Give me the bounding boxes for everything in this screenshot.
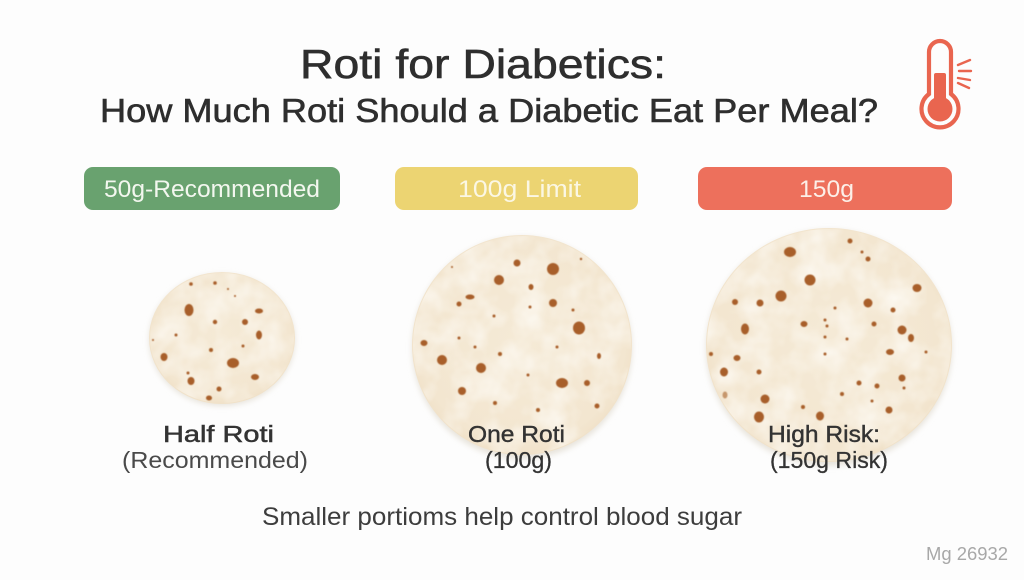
badge: 150g: 150g [799,176,854,203]
label: high risk: (150g Risk) [770,447,888,473]
badge: 50g recommended [84,167,340,210]
badge: 100g limit [395,167,638,210]
label: one roti: (100g) [485,447,552,473]
label: half roti [122,421,308,473]
roti: one [412,235,632,459]
icon: thermometer [922,41,971,127]
roti: half [149,272,295,406]
badge: 100g limit: 100g Limit [458,176,581,203]
label: half roti: (Recommended) [122,447,308,473]
label: one roti [468,421,565,473]
title: Roti for Diabetics: [300,41,666,87]
label: high risk [768,421,888,473]
title: How Much Roti Should a Diabetic Eat Per Meal? [100,92,878,129]
caption: Smaller portioms help control blood sugar [262,503,742,531]
label: half roti: Half Roti [163,421,274,447]
label: one roti: One Roti [468,421,565,447]
badge: 50g recommended: 50g-Recommended [104,176,320,203]
label: high risk: High Risk: [768,421,880,447]
badge: 150g [698,167,952,210]
roti: high risk [706,228,952,466]
title [100,41,878,129]
watermark: Mg 26932 [926,544,1008,564]
